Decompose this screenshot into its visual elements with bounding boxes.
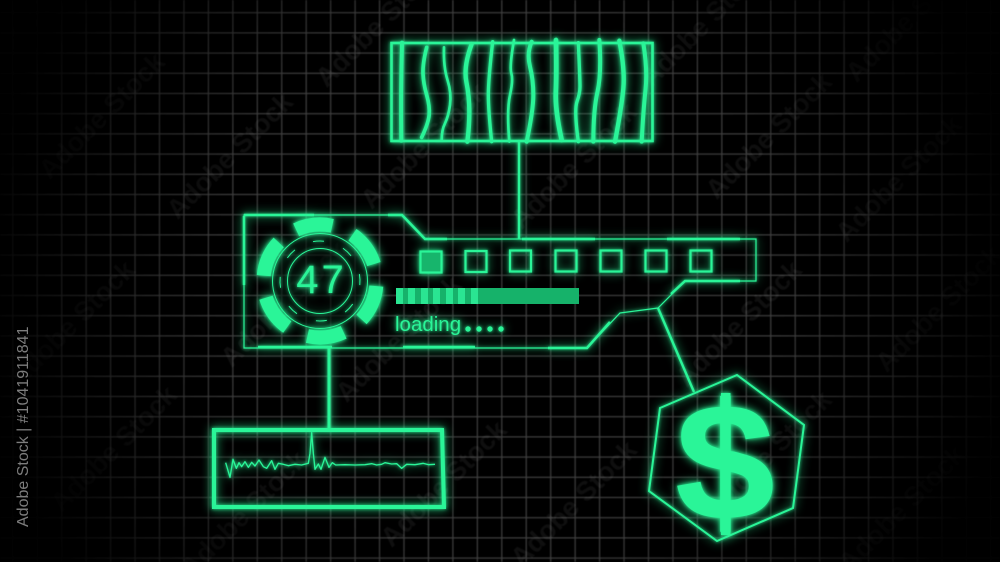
gauge [245,206,395,356]
watermarks: Adobe Stock [33,46,171,185]
dashed ring [274,235,366,327]
watermarks: Adobe Stock [161,86,299,225]
stock id side text: Adobe Stock | #1041911841 [15,326,32,527]
watermarks: Adobe Stock [830,109,968,248]
dollar sign: $ [675,371,775,555]
frame thick accents [244,215,740,348]
gear segments [245,206,395,356]
loading label [395,313,504,336]
wavy lines [401,40,646,142]
watermarks: Adobe Stock [330,269,468,408]
panel: dollar hexagon [649,371,804,555]
watermarks: Adobe Stock [700,66,838,205]
progress track [396,288,579,304]
watermarks: Adobe Stock [355,76,493,215]
panel: wavy bars box [392,40,652,142]
watermarks: Adobe Stock [700,384,838,523]
progress bar [396,288,579,304]
watermarks: Adobe Stock [670,254,808,393]
watermarks: Adobe Stock [215,234,353,373]
dollar bar [721,393,730,535]
waveform frame [214,430,444,507]
connectors [329,141,694,429]
watermarks: Adobe Stock [375,414,513,553]
gauge value: 47 [296,258,347,302]
status squares [420,250,712,272]
watermarks: Adobe Stock [3,254,141,393]
hexagon outline [649,375,804,541]
gauge backing disc [273,234,367,328]
watermarks: Adobe Stock [505,96,643,235]
box frame [392,43,652,141]
panel: waveform box [214,430,444,507]
watermarks: Adobe Stock [45,379,183,518]
panel: main HUD frame [244,215,756,348]
frame outline [244,215,756,348]
outer ring [272,234,368,328]
loading label: loading [395,313,461,336]
progress stripes [396,288,478,304]
inner ring [288,248,352,314]
waveform line [226,433,435,477]
